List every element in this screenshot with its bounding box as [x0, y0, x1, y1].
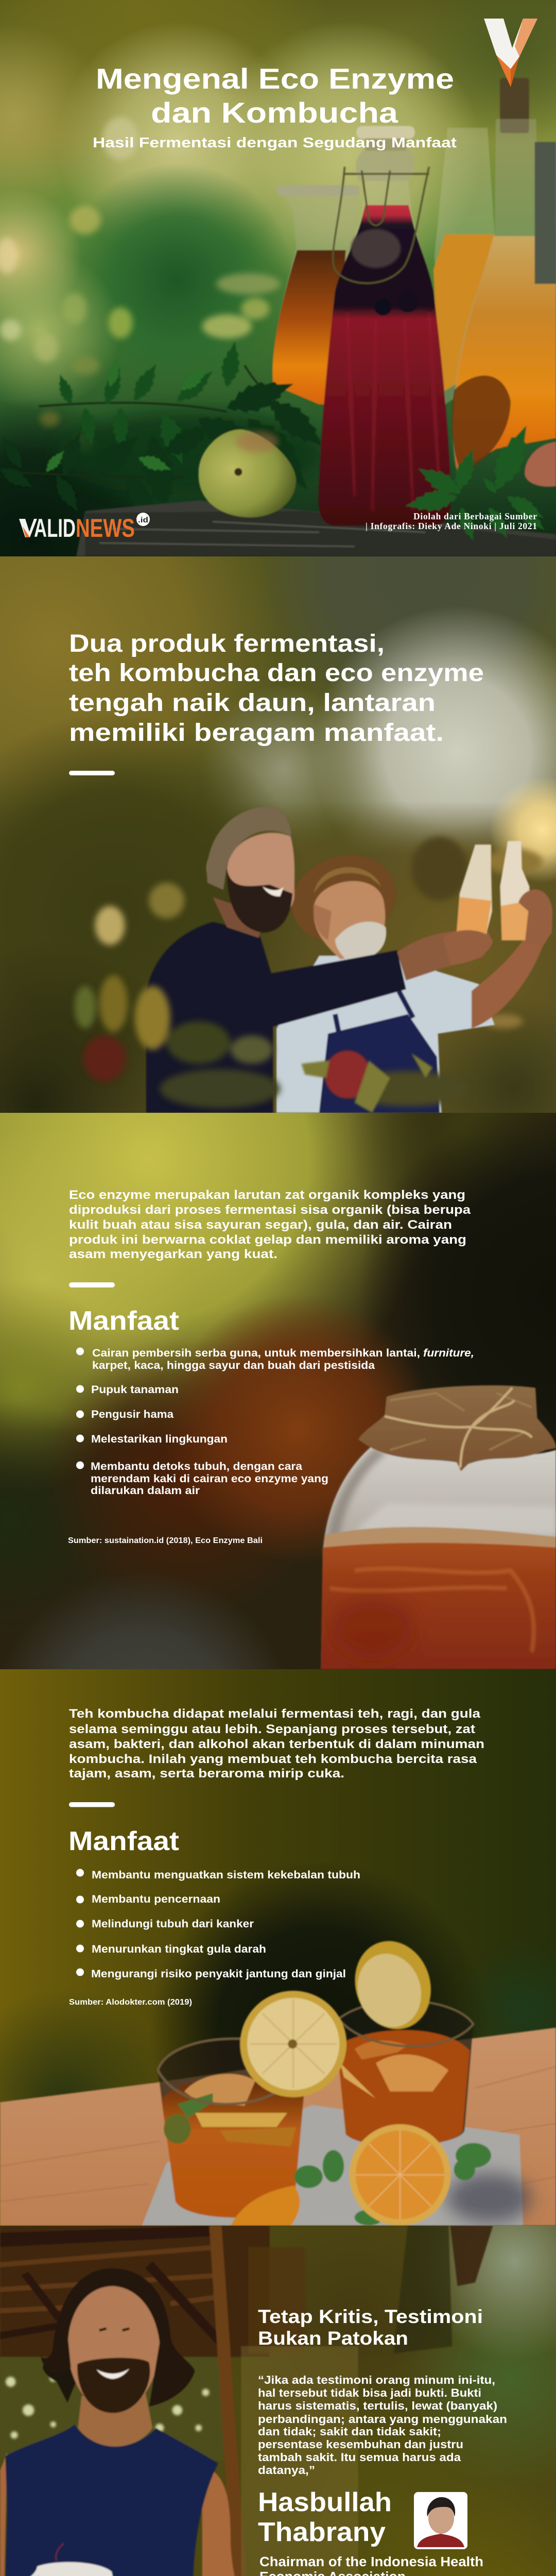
heading: critical testimony: Bukan Patokan	[258, 2328, 408, 2349]
paragraph: eco enzyme definition: produk ini berwarna coklat gelap dan memiliki aroma yang	[69, 1233, 466, 1247]
glass: rear with tea	[337, 2001, 474, 2146]
lemon: cut half foreground	[349, 2124, 450, 2226]
bottle: front right with cork	[452, 78, 556, 472]
paragraph: eco enzyme definition	[69, 1188, 471, 1261]
intro heading: memiliki beragam manfaat.	[69, 719, 444, 747]
logo: Valid News: ALID	[34, 514, 76, 543]
photo: man holding kombucha jar	[0, 2226, 556, 2576]
name: speaker: Thabrany	[258, 2517, 386, 2547]
table: dark weathered wood	[76, 500, 556, 556]
quote text: persentase kesembuhan dan justru	[258, 2438, 463, 2451]
credits	[366, 511, 537, 531]
heading: critical testimony: Tetap Kritis, Testimoni	[258, 2306, 483, 2327]
name: speaker: Hasbullah	[258, 2487, 392, 2517]
list: eco enzyme benefits	[76, 1347, 474, 1497]
list: kombucha benefits: Mengurangi risiko penyakit jantung dan ginjal	[91, 1968, 346, 1980]
list: kombucha benefits: Membantu pencernaan	[92, 1893, 220, 1905]
leaves: mint right	[403, 419, 549, 543]
quote text: hal tersebut tidak bisa jadi bukti. Bukti	[258, 2386, 481, 2399]
list: eco enzyme benefits: Pengusir hama	[91, 1409, 173, 1420]
quote text: harus sistematis, tertulis, lewat (banyak)	[258, 2399, 497, 2412]
logo: Valid News: .id	[138, 516, 148, 524]
intro heading: Dua produk fermentasi,	[69, 630, 385, 657]
photo: men with bottles in orchard	[0, 556, 556, 1113]
quote text	[258, 2374, 507, 2477]
list: eco enzyme benefits: Melestarikan lingkungan	[91, 1433, 228, 1445]
list: eco enzyme benefits: karpet, kaca, hingga sayur dan buah dari pestisida	[92, 1360, 375, 1371]
list: eco enzyme benefits: furniture,	[423, 1347, 474, 1359]
credits: | Infografis: Dieky Ade Ninoki | Juli 2021	[366, 521, 537, 531]
person: older man with hat	[276, 842, 543, 1113]
list: eco enzyme benefits: dilarukan dalam air	[91, 1485, 200, 1497]
paragraph: eco enzyme definition: kulit buah atau sisa sayuran segar), gula, dan air. Cairan	[69, 1218, 452, 1232]
paragraph: eco enzyme definition: Eco enzyme merupakan larutan zat organik kompleks yang	[69, 1188, 465, 1202]
list: kombucha benefits: Membantu menguatkan sistem kekebalan tubuh	[92, 1869, 360, 1881]
table: wood	[0, 2028, 556, 2226]
logo: V mark	[484, 19, 537, 87]
credits: Diolah dari Berbagai Sumber	[413, 511, 537, 521]
panel: testimonial warning	[0, 2226, 556, 2576]
source note: Sumber: sustaination.id (2018), Eco Enzyme Bali	[68, 1536, 263, 1545]
background and tea glasses photo	[0, 1669, 556, 2226]
bottles: raised amber drinks	[456, 841, 529, 951]
portrait: Hasbullah Thabrany	[414, 2492, 467, 2549]
photo: bottles, leaves and pear in garden	[0, 0, 556, 556]
paragraph: kombucha definition: Teh kombucha didapat melalui fermentasi teh, ragi, dan gula	[69, 1707, 480, 1721]
napkin	[142, 2105, 523, 2226]
dark leaf mass behind sprigs	[57, 412, 326, 497]
intro heading: tengah naik daun, lantaran	[69, 689, 436, 717]
logo: Valid News	[19, 513, 150, 543]
pear	[199, 429, 296, 517]
list: kombucha benefits: Melindungi tubuh dari kanker	[92, 1918, 254, 1930]
list: kombucha benefits: Menurunkan tingkat gula darah	[92, 1943, 266, 1955]
bar accent	[69, 771, 115, 775]
bottle: back left amber	[272, 185, 360, 404]
quote text: perbandingan; antara yang menggunakan	[258, 2413, 507, 2426]
quote text: “Jika ada testimoni orang minum ini-itu,	[258, 2374, 495, 2386]
lemon: slice on rear glass	[344, 1931, 442, 2039]
heading: critical testimony	[258, 2306, 483, 2349]
heading: Manfaat: Manfaat	[68, 1826, 179, 1856]
quote text: dan tidak; sakit dan tidak sakit;	[258, 2425, 441, 2438]
hands: holding bottles	[443, 889, 552, 964]
pear: right partial	[525, 442, 556, 487]
role: speaker title: Chairman of the Indonesia Health	[259, 2555, 483, 2569]
list: eco enzyme benefits: Cairan pembersih serba guna, untuk membersihkan lantai,	[92, 1347, 420, 1359]
quote text: tambah sakit. Itu semua harus ada	[258, 2451, 461, 2464]
bar accent	[69, 1282, 115, 1287]
title: dan Kombucha	[151, 96, 398, 129]
role: speaker title	[259, 2555, 483, 2576]
panel: eco enzyme	[0, 1113, 556, 1669]
panel: intro with two men toasting	[0, 556, 556, 1113]
bar accent	[69, 1802, 115, 1807]
shadow on napkin	[447, 2173, 532, 2223]
source note: Sumber: Alodokter.com (2019)	[69, 1998, 192, 2007]
jar: glass and tea	[321, 1443, 556, 1669]
bottle: central red fermenting drink	[318, 126, 451, 526]
logo: Valid News: NEWS	[76, 514, 135, 543]
list: eco enzyme benefits: merendam kaki di cairan eco enzyme yang	[91, 1473, 328, 1485]
paragraph: kombucha definition	[69, 1707, 484, 1781]
name: speaker	[258, 2487, 392, 2547]
paragraph: eco enzyme definition: diproduksi dari proses fermentasi sisa organik (bisa berupa	[69, 1203, 471, 1217]
leaves: mint sprigs left	[0, 340, 333, 527]
subtitle: Hasil Fermentasi dengan Segudang Manfaat	[93, 134, 457, 150]
paragraph: kombucha definition: kombucha. Inilah yang membuat teh kombucha bercita rasa	[69, 1752, 477, 1766]
list: kombucha benefits	[76, 1869, 360, 1980]
jar lid: brown paper and twine	[358, 1385, 556, 1471]
mint leaves	[294, 2143, 491, 2225]
title: Mengenal Eco Enzyme	[96, 62, 454, 95]
person: younger man with beard	[146, 806, 492, 1113]
title	[96, 62, 454, 129]
paragraph: kombucha definition: asam, bakteri, dan alkohol akan terbentuk di dalam minuman	[69, 1737, 484, 1751]
jar: kombucha with cloth cover	[14, 2543, 147, 2576]
background gradient and jar	[0, 1113, 556, 1669]
person: smiling bearded man	[0, 2268, 245, 2576]
list: eco enzyme benefits: Membantu detoks tubuh, dengan cara	[91, 1461, 302, 1472]
lemon peel at glass foot	[231, 2185, 300, 2226]
intro heading	[69, 630, 484, 747]
bottle: back right amber	[433, 128, 495, 408]
paragraph: kombucha definition: selama seminggu atau lebih. Sepanjang proses tersebut, zat	[69, 1722, 475, 1736]
list: eco enzyme benefits: Pupuk tanaman	[91, 1384, 179, 1396]
panel: kombucha	[0, 1669, 556, 2226]
lemon: slice on front glass	[240, 1991, 346, 2097]
paragraph: eco enzyme definition: asam menyegarkan yang kuat.	[69, 1247, 277, 1261]
foreground: apples and foliage	[75, 975, 468, 1113]
intro heading: teh kombucha dan eco enzyme	[69, 659, 484, 687]
quote text: datanya,”	[258, 2464, 315, 2477]
heading: Manfaat: Manfaat	[68, 1306, 179, 1336]
structure: roof and posts	[0, 2226, 493, 2576]
glass: front with tea	[158, 2039, 305, 2217]
paragraph: kombucha definition: tajam, asam, serta beraroma mirip cuka.	[69, 1767, 344, 1781]
panel: hero with fermented bottles	[0, 0, 556, 556]
